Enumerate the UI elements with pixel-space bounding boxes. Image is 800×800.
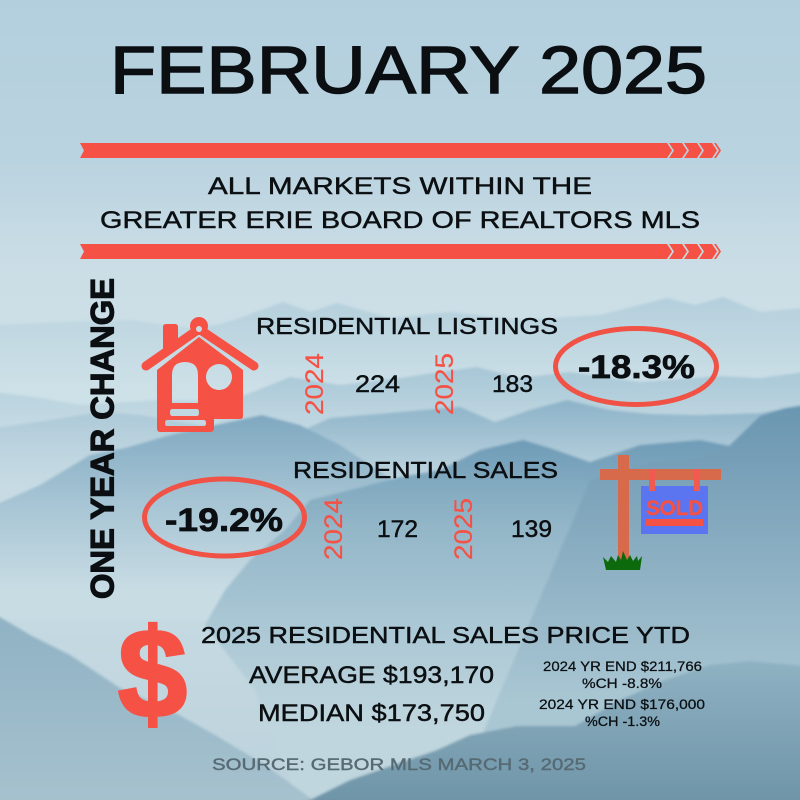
heading: residential sales: RESIDENTIAL SALES <box>293 457 558 483</box>
icon: sold sign: SOLD <box>646 497 703 520</box>
sales figures <box>320 498 552 560</box>
icon: sold sign <box>600 455 721 570</box>
prior year comparisons: %CH -8.8% <box>582 676 662 691</box>
listings figures <box>301 353 533 415</box>
icon: house <box>146 317 254 432</box>
listings figures: 183 <box>492 371 533 398</box>
subtitle: ALL MARKETS WITHIN THE <box>208 173 592 200</box>
average and median prices: AVERAGE $193,170 <box>249 662 494 689</box>
side heading: one year change: ONE YEAR CHANGE <box>84 278 120 599</box>
listings figures: 224 <box>355 371 400 398</box>
heading: sales price: 2025 RESIDENTIAL SALES PRICE YTD <box>201 622 690 648</box>
arrow banner: top <box>80 143 721 158</box>
arrow banner: bottom <box>80 244 721 259</box>
prior year comparisons <box>539 659 705 729</box>
listings figures: 2024 <box>301 353 329 415</box>
sales figures: 2025 <box>450 498 478 560</box>
sales figures: 2024 <box>320 498 348 560</box>
listings figures: 2025 <box>431 353 459 415</box>
prior year comparisons: 2024 YR END $211,766 <box>543 659 702 674</box>
heading: residential listings: RESIDENTIAL LISTINGS <box>256 313 558 339</box>
callout: sales change <box>144 479 304 556</box>
prior year comparisons: %CH -1.3% <box>585 714 660 729</box>
callout: sales change: -19.2% <box>165 502 283 538</box>
sales figures: 172 <box>377 516 418 543</box>
source note: SOURCE: GEBOR MLS MARCH 3, 2025 <box>212 755 586 774</box>
title: FEBRUARY 2025 <box>110 33 707 108</box>
average and median prices: MEDIAN $173,750 <box>258 700 485 727</box>
icon: dollar sign: $ <box>118 603 187 744</box>
callout: listings change: -18.3% <box>578 349 695 385</box>
average and median prices <box>249 662 494 727</box>
callout: listings change <box>556 328 716 404</box>
subtitle: GREATER ERIE BOARD OF REALTORS MLS <box>100 207 700 234</box>
sales figures: 139 <box>511 516 552 543</box>
subtitle <box>100 173 700 234</box>
prior year comparisons: 2024 YR END $176,000 <box>539 697 705 712</box>
